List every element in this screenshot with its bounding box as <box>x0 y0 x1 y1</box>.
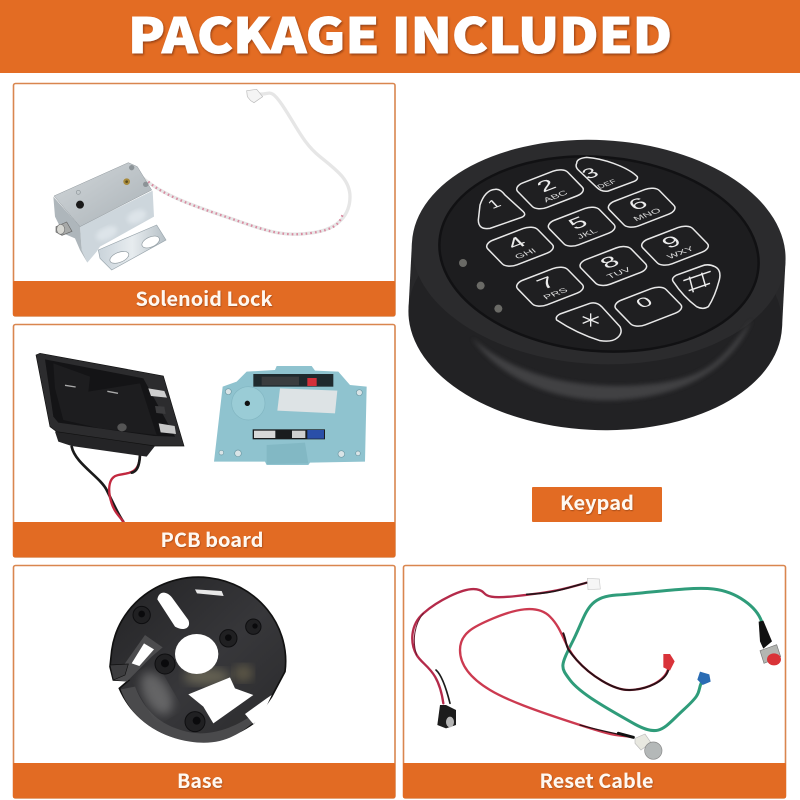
led bulb <box>618 733 662 759</box>
key 8: TUV <box>605 266 634 281</box>
key 5: 5 <box>564 213 592 233</box>
key 8: 8 <box>595 252 624 272</box>
title banner <box>0 0 800 73</box>
red and black cable two <box>460 609 668 737</box>
pcb board image <box>36 353 367 522</box>
label: keypad: Keypad <box>560 487 634 516</box>
rim highlight <box>472 320 752 400</box>
black tray <box>36 353 184 457</box>
panel: base <box>13 566 395 798</box>
key 9: 9 <box>657 232 685 252</box>
solenoid lock image <box>53 89 350 270</box>
key 7 <box>513 265 587 309</box>
battery clip <box>437 705 456 728</box>
key 7: 7 <box>532 273 560 293</box>
key 3: DEF <box>596 178 618 190</box>
label: keypad <box>532 487 662 522</box>
red push button <box>759 621 781 665</box>
green cable <box>563 588 762 731</box>
key 9 <box>638 224 712 268</box>
red and black cable one <box>412 583 587 703</box>
key 0 <box>611 285 685 329</box>
keypad face <box>431 143 767 365</box>
panel: reset cable <box>403 566 786 798</box>
label bar: pcb board <box>13 522 395 557</box>
key 4 <box>483 225 557 269</box>
label bar: solenoid lock <box>13 281 395 316</box>
key 8 <box>576 244 650 288</box>
base plate image <box>110 577 286 743</box>
key 4: 4 <box>502 233 530 253</box>
key 5: JKL <box>575 227 600 241</box>
key hash <box>673 265 720 308</box>
blue module <box>214 366 367 465</box>
red connector <box>663 654 675 671</box>
key 0: 0 <box>632 294 657 311</box>
blue connector <box>697 672 711 685</box>
label bar: reset cable <box>403 763 786 798</box>
key 2: 2 <box>532 176 560 195</box>
white connector <box>587 578 600 590</box>
label bar: solenoid lock: Solenoid Lock <box>136 283 273 312</box>
key 2: ABC <box>542 189 570 204</box>
key 9: WXY <box>665 245 697 261</box>
panel: pcb board <box>13 324 395 557</box>
label bar: base <box>13 763 395 798</box>
label bar: pcb board: PCB board <box>160 524 264 553</box>
key 6: MNO <box>632 207 664 223</box>
indicator lights <box>459 259 502 313</box>
key star <box>556 303 621 341</box>
keypad body <box>403 130 791 440</box>
key 7: PRS <box>542 287 570 301</box>
key 1 <box>478 189 525 229</box>
key 6 <box>605 186 679 230</box>
cable image <box>412 578 781 759</box>
key 6: 6 <box>624 194 652 214</box>
key 5 <box>545 205 619 249</box>
key 1: 1 <box>484 197 504 212</box>
key 3 <box>576 157 637 191</box>
label bar: reset cable: Reset Cable <box>540 765 654 794</box>
key 3: 3 <box>578 165 603 182</box>
panel: solenoid lock <box>13 84 395 316</box>
wires <box>72 447 140 522</box>
key 2 <box>513 167 587 211</box>
label bar: base: Base <box>177 765 223 794</box>
keypad image <box>403 130 791 440</box>
keypad keys <box>459 157 720 341</box>
key 4: GHI <box>513 247 539 261</box>
